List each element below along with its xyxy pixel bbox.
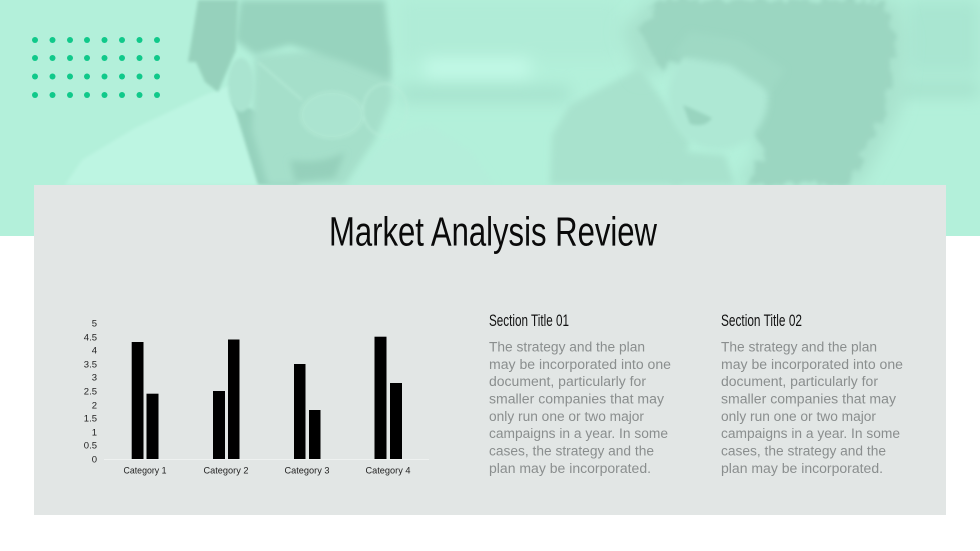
- left person: [70, 0, 393, 185]
- section body 02: only run one or two major: [721, 409, 877, 424]
- dot grid decoration: [32, 37, 160, 98]
- section body 02: may be incorporated into one: [721, 357, 903, 372]
- face: [708, 61, 768, 132]
- y axis labels: 3: [92, 372, 97, 384]
- section title 01: Section Title 01: [489, 312, 569, 330]
- section body 01: plan may be incorporated.: [489, 461, 651, 476]
- section body 01: campaigns in a year. In some: [489, 426, 668, 441]
- y axis labels: 2: [92, 400, 97, 412]
- jacket: [550, 68, 690, 185]
- y axis labels: 1: [92, 428, 97, 438]
- text block: section 01: [489, 312, 671, 476]
- y axis labels: 0.5: [84, 440, 97, 452]
- bar chart: [84, 318, 429, 476]
- category labels: Category 1: [124, 466, 166, 476]
- hair: [640, 0, 895, 185]
- y axis labels: 3.5: [84, 360, 97, 370]
- hair halo: [620, 0, 908, 185]
- section body 01: only run one or two major: [489, 409, 645, 424]
- y axis labels: 5: [92, 318, 97, 330]
- section body 01: document, particularly for: [489, 374, 647, 389]
- y axis labels: 0: [92, 454, 97, 466]
- panel: content card: [34, 185, 946, 515]
- section title 02: Section Title 02: [721, 312, 802, 330]
- y axis labels: 1.5: [84, 414, 97, 424]
- section body 01: cases, the strategy and the: [489, 444, 654, 458]
- section body 02: plan may be incorporated.: [721, 461, 883, 476]
- glasses: [361, 105, 364, 120]
- y axis labels: [84, 318, 97, 466]
- section body 02: smaller companies that may: [721, 392, 896, 406]
- face: [252, 45, 392, 185]
- photo banner: two people in mint duotone: [0, 0, 980, 236]
- section body 01: [489, 340, 671, 476]
- title: Market Analysis Review: [329, 208, 657, 254]
- neck: [234, 108, 274, 185]
- hair: [235, 0, 390, 80]
- right person: [550, 0, 908, 185]
- section body 02: document, particularly for: [721, 374, 879, 389]
- y axis labels: 2.5: [84, 386, 97, 398]
- y axis labels: 4.5: [84, 332, 97, 344]
- category labels: [124, 466, 410, 476]
- section body 02: The strategy and the plan: [721, 340, 877, 354]
- section body 02: campaigns in a year. In some: [721, 426, 900, 441]
- y axis labels: 4: [92, 346, 97, 356]
- text block: section 02: [721, 312, 903, 476]
- bars: [132, 337, 402, 459]
- category labels: Category 3: [284, 466, 330, 476]
- section body 02: cases, the strategy and the: [721, 444, 886, 458]
- section body 01: The strategy and the plan: [489, 340, 645, 354]
- ear: [228, 59, 251, 112]
- category labels: Category 4: [366, 466, 410, 476]
- category labels: Category 2: [204, 466, 248, 476]
- section body 01: smaller companies that may: [489, 392, 664, 406]
- jacket: [70, 89, 256, 184]
- section body 02: [721, 340, 903, 476]
- section body 01: may be incorporated into one: [489, 357, 671, 372]
